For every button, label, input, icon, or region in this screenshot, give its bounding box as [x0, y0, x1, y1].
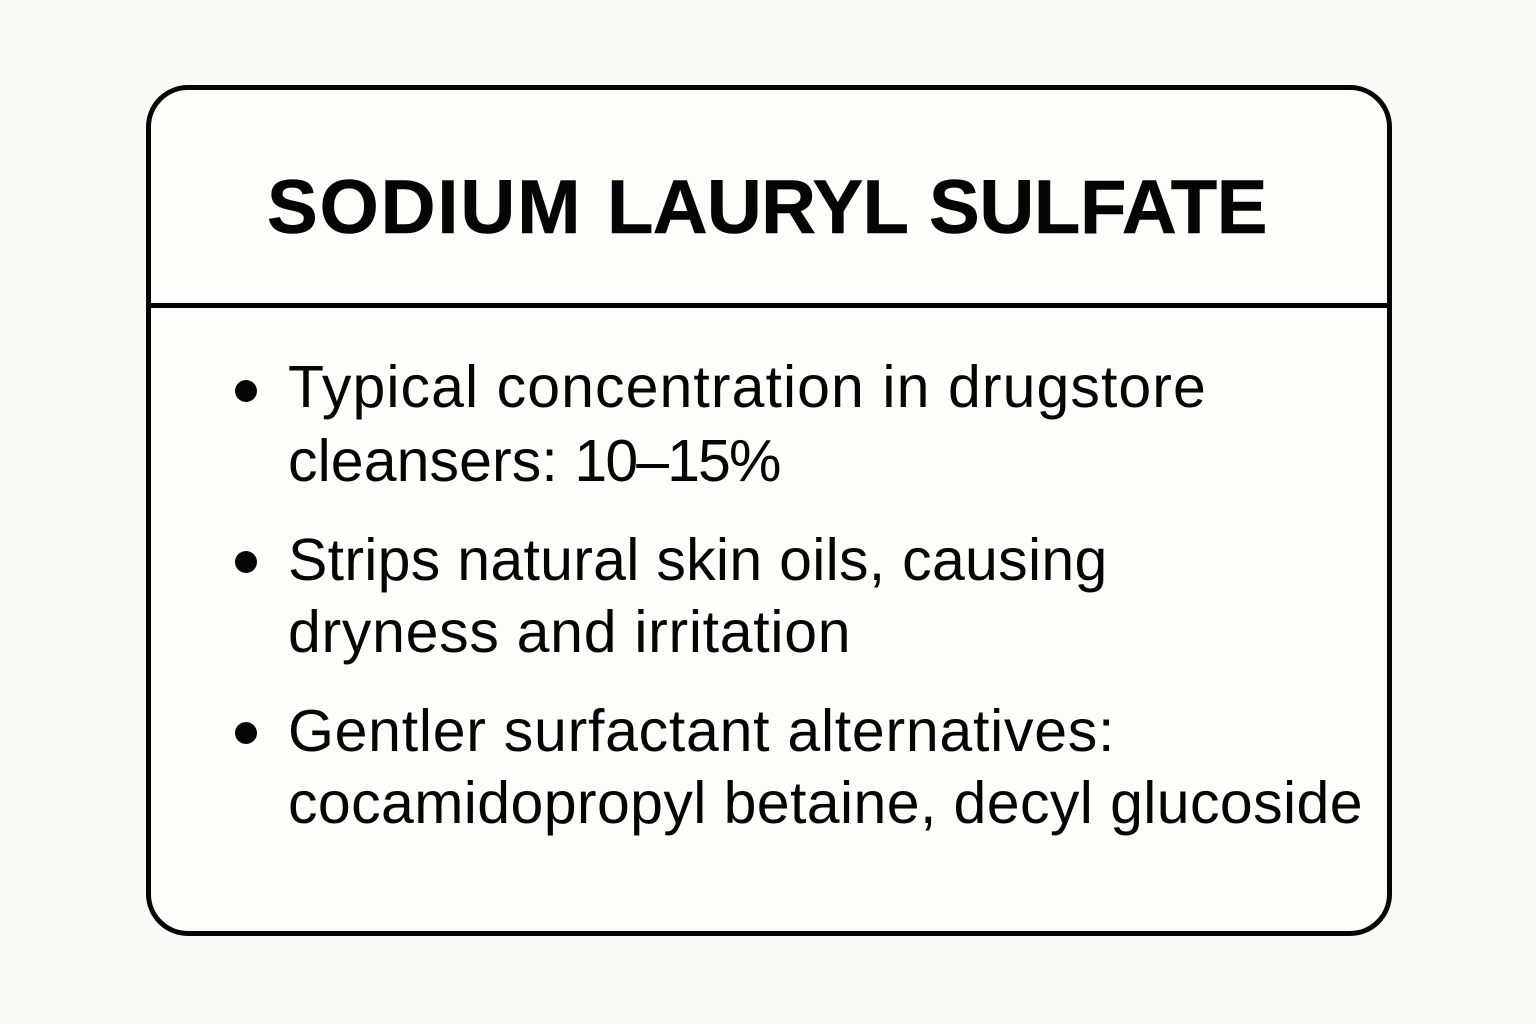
bullet: skin effects [235, 527, 1108, 665]
title [267, 165, 1267, 250]
bullet: alternatives [235, 698, 1363, 836]
bullet: concentration: Typical concentration in drugstore [288, 354, 1207, 420]
header divider [149, 303, 1389, 308]
bullet: alternatives: cocamidopropyl betaine, decyl glucoside [288, 770, 1363, 836]
title: SULFATE [929, 165, 1267, 250]
bullet: skin effects: Strips natural skin oils, causing [288, 527, 1108, 593]
title: SODIUM [267, 165, 582, 250]
title: LAURYL [607, 165, 908, 250]
bullet: concentration [235, 354, 1207, 494]
bullet: concentration: cleansers: 10–15% [288, 428, 780, 494]
bullet: alternatives: Gentler surfactant alternatives: [288, 698, 1115, 764]
panel: ingredient card [146, 85, 1392, 936]
bullet: skin effects: dryness and irritation [288, 599, 851, 665]
